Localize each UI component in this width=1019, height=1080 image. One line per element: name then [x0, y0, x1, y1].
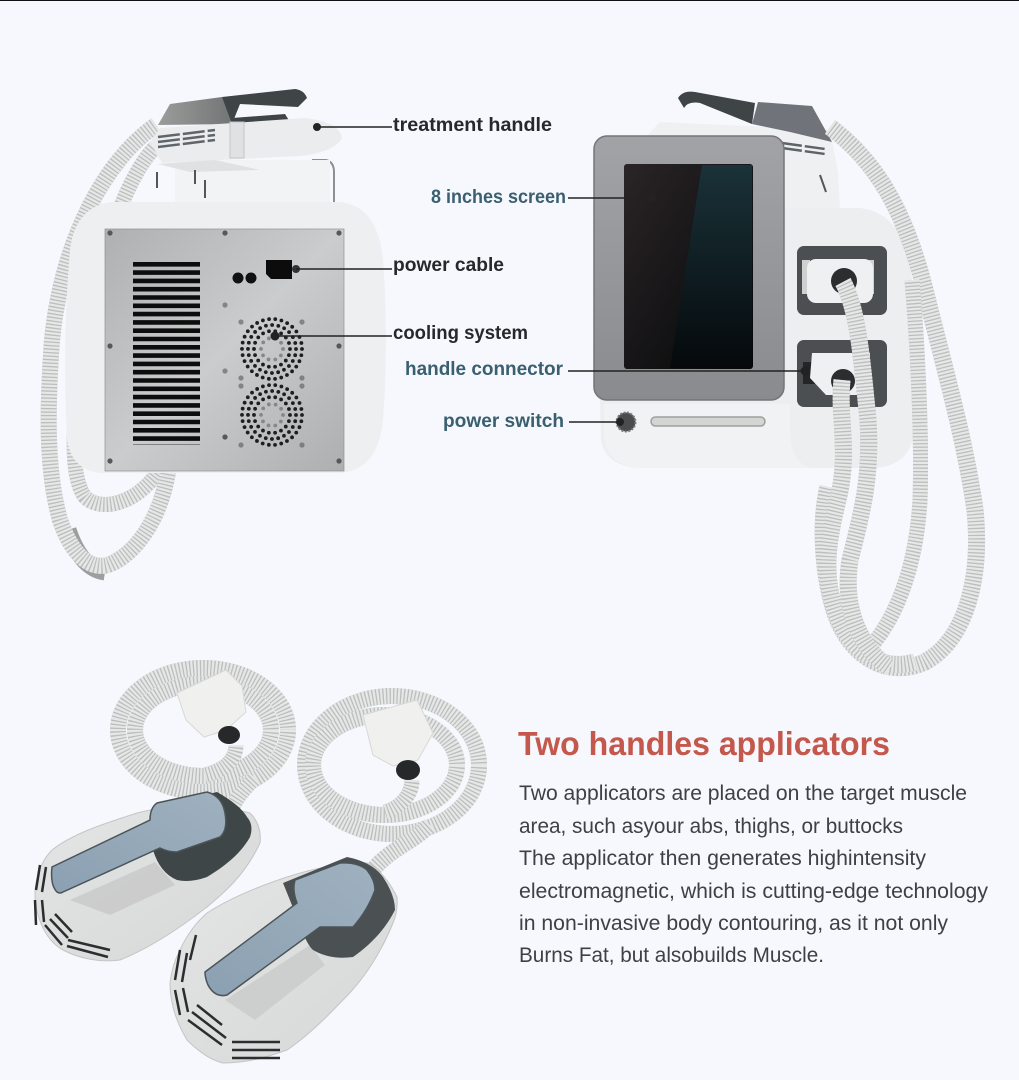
rear machine cables	[49, 125, 168, 572]
light strip	[651, 417, 765, 426]
description text: Burns Fat, but alsobuilds Muscle.	[519, 944, 824, 967]
recess shade left	[70, 862, 175, 915]
top handle seen from front	[647, 92, 840, 210]
callout: cooling system: cooling system	[393, 323, 528, 344]
long outer cable	[823, 127, 977, 668]
connector plug right	[363, 700, 433, 780]
rear panel	[105, 229, 344, 471]
description text: Two applicators are placed on the target muscle	[519, 782, 967, 805]
description text	[519, 782, 988, 967]
callout: power switch: power switch	[443, 411, 564, 432]
vent slots left	[35, 865, 110, 957]
callout: power cable: power cable	[393, 255, 504, 276]
ventilation slots	[133, 262, 200, 445]
dark handle base left	[153, 792, 251, 881]
recess shade right	[225, 945, 325, 1020]
display	[624, 164, 753, 369]
callout: 8 inches screen: 8 inches screen	[431, 187, 566, 208]
screen bezel	[594, 136, 784, 400]
handle dock lower	[797, 340, 887, 407]
cables from docks	[828, 282, 915, 668]
coiled cable left	[118, 668, 288, 808]
treatment handle on top	[150, 89, 342, 204]
applicator left	[35, 668, 288, 961]
description text: area, such asyour abs, thighs, or buttocks	[519, 815, 903, 838]
handle dock upper	[797, 246, 887, 315]
vent slots right	[175, 935, 280, 1058]
callout: treatment handle: treatment handle	[393, 115, 552, 136]
connector plug left	[177, 670, 246, 744]
callout: treatment handle	[313, 115, 552, 136]
blue grip right	[205, 863, 375, 996]
heading: Two handles applicators	[518, 725, 890, 762]
power switch knob	[616, 412, 636, 432]
applicator right	[170, 696, 479, 1063]
applicator pod left	[35, 806, 260, 961]
description text: in non-invasive body contouring, as it not only	[519, 912, 949, 935]
callout: power switch	[443, 411, 624, 432]
coiled cable right	[305, 696, 479, 878]
callout: handle connector	[405, 359, 810, 380]
description text: electromagnetic, which is cutting-edge technology	[519, 880, 988, 903]
callout: cooling system	[270, 323, 528, 344]
cooling fan grilles	[242, 319, 302, 445]
callout: handle connector: handle connector	[405, 359, 564, 380]
callout: 8 inches screen	[431, 187, 656, 208]
rear view machine	[49, 89, 386, 572]
blue grip left	[52, 792, 226, 893]
dark handle base right	[283, 857, 395, 958]
applicator pod right	[170, 863, 397, 1063]
power socket	[232, 260, 300, 284]
front view machine	[594, 92, 977, 668]
rear machine housing	[65, 202, 386, 473]
front machine housing	[600, 208, 914, 468]
description text: The applicator then generates highintensity	[519, 847, 926, 870]
